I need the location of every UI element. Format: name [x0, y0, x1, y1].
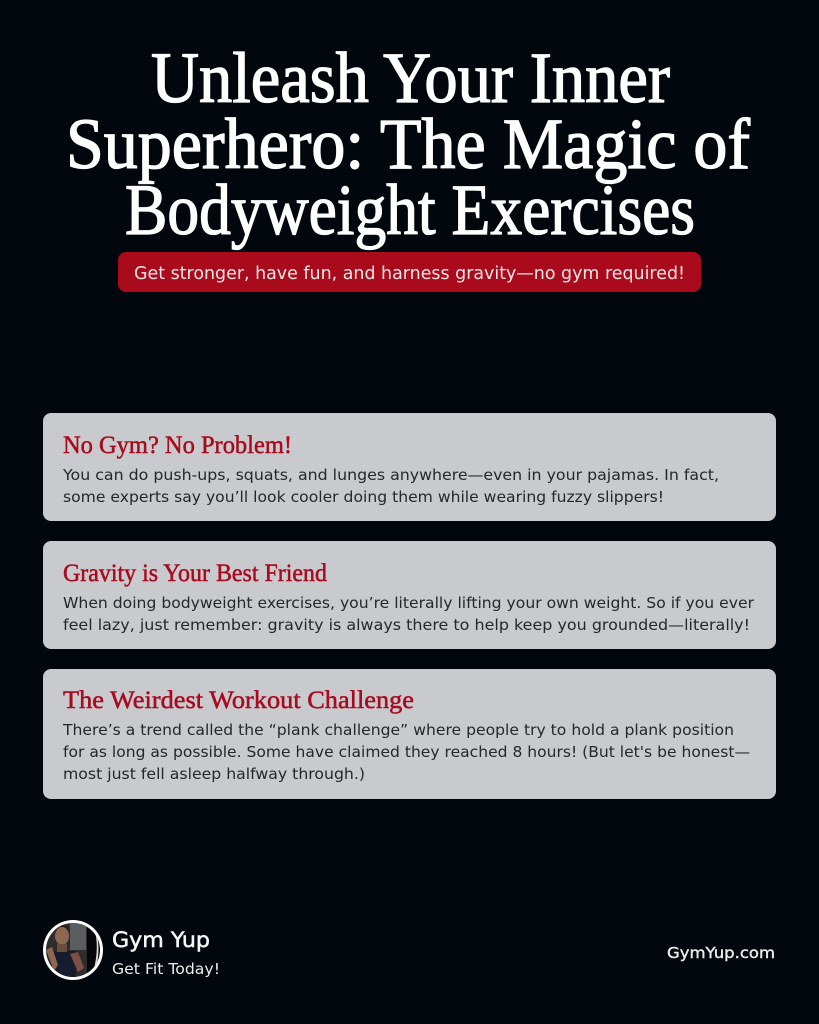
panel: challenge — [43, 669, 776, 799]
text: challenge: There’s a trend called the “plank challenge” where people try to hold a plank position — [62, 721, 734, 739]
text: no gym — [62, 466, 719, 506]
text: no gym: You can do push-ups, squats, and lunges anywhere—even in your pajamas. In fact, — [62, 466, 719, 484]
heading: no gym: No Gym? No Problem! — [63, 432, 292, 459]
text: challenge — [62, 721, 750, 783]
subtitle banner — [118, 252, 701, 292]
title — [66, 38, 750, 250]
title: Bodyweight Exercises — [125, 170, 695, 250]
panel: no gym — [43, 413, 776, 521]
heading: gravity: Gravity is Your Best Friend — [63, 560, 327, 587]
text: gravity: feel lazy, just remember: gravity is always there to help keep you grounded—literally! — [63, 616, 750, 634]
title: Superhero: The Magic of — [66, 104, 750, 184]
text: challenge: most just fell asleep halfway through.) — [63, 765, 365, 783]
text: gravity — [63, 594, 755, 634]
tagline: Get Fit Today! — [112, 960, 220, 978]
text: gravity: When doing bodyweight exercises, you’re literally lifting your own weight. So if you ever — [63, 594, 755, 612]
title: Unleash Your Inner — [151, 38, 670, 118]
text: no gym: some experts say you’ll look cooler doing them while wearing fuzzy slippers! — [63, 488, 664, 506]
panel: gravity — [43, 541, 776, 649]
heading: challenge: The Weirdest Workout Challenge — [63, 687, 414, 714]
text: challenge: for as long as possible. Some have claimed they reached 8 hours! (But let's be honest— — [63, 743, 750, 761]
website: GymYup.com — [667, 944, 775, 962]
brand name: Gym Yup — [112, 928, 210, 952]
subtitle banner: Get stronger, have fun, and harness gravity—no gym required! — [134, 264, 685, 284]
icon: avatar photo — [43, 920, 103, 981]
